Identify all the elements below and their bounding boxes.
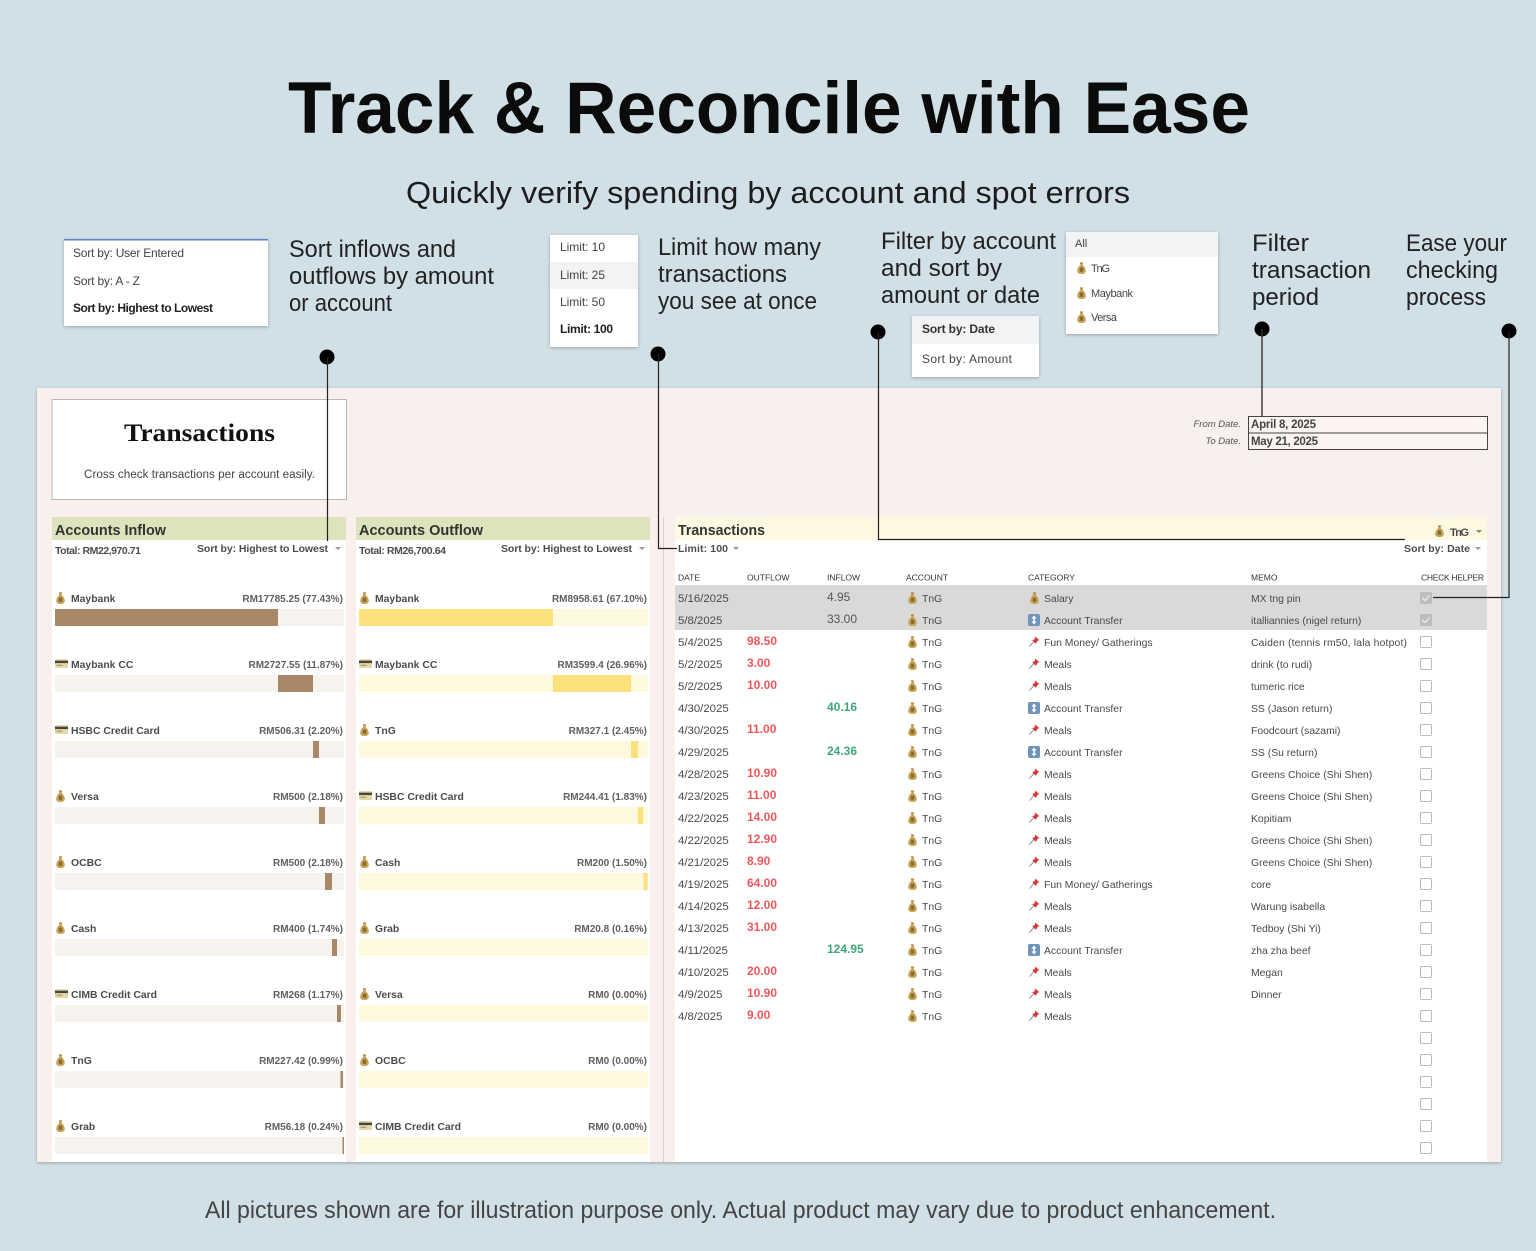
row 12: 4/22/2025 [678,835,729,847]
row 17: 4/11/2025 [678,945,728,957]
bar: CIMB Credit Card: CIMB Credit Card [71,990,157,1001]
row 19: 10.90 [747,986,777,1000]
row 6: 4/30/2025 [678,703,729,715]
date filter: From Date. [1193,419,1241,430]
row 3 [678,634,1432,649]
row 15 [678,898,1432,913]
row 18: Megan [1251,968,1283,979]
callout: sort: Sort inflows and [289,236,456,263]
bar: Cash: RM200 (1.50%) [577,858,647,869]
row 13: 8.90 [747,854,771,868]
row 8: 24.36 [827,744,857,758]
bar: Grab [359,922,648,956]
row 7: Foodcourt (sazami) [1251,726,1341,737]
row 19 [678,986,1432,1001]
bar: Maybank CC: RM2727.55 (11.87%) [248,660,343,671]
row 6 [678,700,1432,715]
bar: Maybank: RM8958.61 (67.10%) [552,594,647,605]
row 19: Dinner [1251,990,1282,1001]
bar: CIMB Credit Card [55,989,344,1022]
dropdown: account: Maybank [1091,288,1134,300]
dropdown: sort inflows: Sort by: A - Z [73,274,140,288]
row 10: Greens Choice (Shi Shen) [1251,792,1372,803]
row 8: SS (Su return) [1251,748,1317,759]
callout: filter account [881,228,1056,309]
panel: header box: Cross check transactions per account easily. [84,469,315,481]
row 1: 4.95 [827,590,851,604]
row 18: 20.00 [747,964,777,978]
row 11: Meals [1044,814,1072,825]
row 4: Meals [1044,660,1072,671]
callout: check helper [1406,230,1507,311]
callout: sort: or account [289,290,392,317]
row 17: TnG [922,946,942,957]
row 9: TnG [922,770,942,781]
bar: CIMB Credit Card [359,1121,648,1154]
row 11: Kopitiam [1251,814,1291,825]
panel: accounts inflow: Sort by: Highest to Lowest [197,543,328,555]
row 15: 12.00 [747,898,777,912]
bar: TnG [359,724,648,758]
row 5: tumeric rice [1251,682,1305,693]
callout: filter period [1252,230,1371,311]
table header [678,572,1484,582]
bar: Maybank: RM17785.25 (77.43%) [242,594,343,605]
row 12: 12.90 [747,832,777,846]
table header: OUTFLOW [747,572,790,582]
row 15: Warung isabella [1251,902,1325,913]
row 16: TnG [922,924,942,935]
row 4 [678,656,1432,671]
callout: check helper: checking [1406,257,1498,284]
bar: TnG: TnG [71,1056,92,1067]
bar: Cash [359,856,648,890]
row 14: 4/19/2025 [678,879,729,891]
row 1 [678,590,1432,605]
row 1: MX tng pin [1251,594,1301,605]
row 7: 4/30/2025 [678,725,729,737]
row 4: TnG [922,660,942,671]
row 14: 64.00 [747,876,777,890]
dropdown: account: All [1075,238,1087,250]
connector: date period [1254,322,1270,416]
dropdown: sort inflows: Sort by: Highest to Lowest [73,301,213,315]
bar: Maybank CC [55,659,344,692]
row 12: Greens Choice (Shi Shen) [1251,836,1372,847]
bar: HSBC Credit Card [359,791,648,824]
row 14: Fun Money/ Gatherings [1044,880,1153,891]
row 5 [678,678,1432,693]
callout: check helper: process [1406,284,1486,311]
bar: OCBC [55,856,344,890]
table header: DATE [678,572,700,582]
bar: TnG: TnG [375,726,396,737]
row 7: Meals [1044,726,1072,737]
bar: TnG: RM227.42 (0.99%) [259,1056,343,1067]
bar: Cash: Cash [375,858,400,869]
bar: Cash [55,922,344,956]
row 14: core [1251,880,1271,891]
bar: Versa [55,790,344,824]
panel: spreadsheet [37,388,1501,1162]
bar: CIMB Credit Card: RM0 (0.00%) [588,1122,647,1133]
empty checkboxes [1420,1032,1432,1154]
connector: filter account [870,324,1405,540]
row 2: TnG [922,616,942,627]
bar: OCBC: OCBC [375,1056,406,1067]
callout: limit [658,234,821,315]
panel: transactions table: TnG [1450,527,1469,539]
row 1: 5/16/2025 [678,593,729,605]
bar: Maybank CC: RM3599.4 (26.96%) [558,660,647,671]
row 13: Greens Choice (Shi Shen) [1251,858,1372,869]
bar: HSBC Credit Card: HSBC Credit Card [375,792,464,803]
date filter: May 21, 2025 [1251,436,1319,448]
row 18: TnG [922,968,942,979]
row 16: 4/13/2025 [678,923,729,935]
row 4: 3.00 [747,656,771,670]
callout: sort [289,236,494,317]
bar: OCBC: RM500 (2.18%) [273,858,343,869]
dropdown: sort inflows [64,239,268,326]
footer note: All pictures shown are for illustration purpose only. Actual product may vary due to product enhancement. [205,1197,1276,1224]
callout: limit: you see at once [658,288,817,315]
row 15: 4/14/2025 [678,901,729,913]
bar: Maybank CC: Maybank CC [71,660,134,671]
row 7 [678,722,1432,737]
table header: INFLOW [827,572,860,582]
bar: Maybank CC: Maybank CC [375,660,438,671]
connector: check helper [1433,324,1516,598]
row 14 [678,876,1432,891]
row 3: Caiden (tennis rm50, lala hotpot) [1251,638,1407,649]
bar: Versa [359,988,648,1022]
callout: check helper: Ease your [1406,230,1507,257]
date filter: April 8, 2025 [1251,419,1317,431]
panel: transactions table: Transactions [678,522,765,539]
row 18 [678,964,1432,979]
row 20 [678,1008,1432,1023]
row 20: Meals [1044,1012,1072,1023]
bar: TnG: RM327.1 (2.45%) [569,726,647,737]
dropdown: sort inflows: Sort by: User Entered [73,246,184,260]
panel: transactions table: Limit: 100 [678,543,728,555]
row 6: 40.16 [827,700,857,714]
row 19: 4/9/2025 [678,989,722,1001]
subtitle: Quickly verify spending by account and spot errors [406,175,1130,210]
row 13: 4/21/2025 [678,857,729,869]
callout: filter account: amount or date [881,282,1040,309]
row 15: TnG [922,902,942,913]
row 1: TnG [922,594,942,605]
dropdown: limit: Limit: 100 [560,322,613,336]
bar: Versa: Versa [375,990,403,1001]
dropdown: limit: Limit: 50 [560,295,605,309]
panel: accounts inflow: Accounts Inflow [55,522,166,539]
panel: accounts inflow: Total: RM22,970.71 [55,545,141,557]
bar: Grab: RM56.18 (0.24%) [265,1122,343,1133]
row 11: TnG [922,814,942,825]
bar: OCBC: OCBC [71,858,102,869]
panel: transactions table [675,517,1487,1162]
bar: Versa: RM0 (0.00%) [588,990,647,1001]
bar: OCBC [359,1054,648,1088]
row 5: 10.00 [747,678,777,692]
row 13 [678,854,1432,869]
row 6: Account Transfer [1044,704,1123,715]
row 5: TnG [922,682,942,693]
row 17 [678,942,1432,957]
table header: ACCOUNT [906,572,948,582]
bar: Maybank [55,592,344,626]
bar: Maybank: Maybank [375,594,420,605]
table header: MEMO [1251,572,1278,582]
bar: Grab: Grab [71,1122,95,1133]
row 5: 5/2/2025 [678,681,722,693]
row 9: Greens Choice (Shi Shen) [1251,770,1372,781]
row 4: 5/2/2025 [678,659,722,671]
bar: Maybank CC [359,659,648,692]
dropdown: sort date [912,316,1039,377]
bar: CIMB Credit Card: RM268 (1.17%) [273,990,343,1001]
row 19: TnG [922,990,942,1001]
bar: TnG [55,1054,344,1088]
panel: accounts outflow: Accounts Outflow [359,522,483,539]
bar: OCBC: RM0 (0.00%) [588,1056,647,1067]
row 2 [678,612,1432,627]
bar: Versa: RM500 (2.18%) [273,792,343,803]
bar: HSBC Credit Card: RM244.41 (1.83%) [563,792,647,803]
row 10: Meals [1044,792,1072,803]
row 8: Account Transfer [1044,748,1123,759]
dropdown: account: TnG [1091,263,1110,275]
table header: CHECK HELPER [1421,572,1484,582]
row 19: Meals [1044,990,1072,1001]
callout: filter period: Filter [1252,230,1309,257]
table header: CATEGORY [1028,572,1075,582]
bar: Grab [55,1120,344,1154]
row 13: TnG [922,858,942,869]
row 14: TnG [922,880,942,891]
panel: accounts inflow [52,517,346,1162]
row 11 [678,810,1432,825]
panel: accounts outflow: Total: RM26,700.64 [359,545,446,557]
row 2: Account Transfer [1044,616,1123,627]
bar: CIMB Credit Card: CIMB Credit Card [375,1122,461,1133]
row 8: TnG [922,748,942,759]
row 9: Meals [1044,770,1072,781]
date filter: To Date. [1205,436,1241,447]
panel: transactions table: Sort by: Date [1404,543,1470,555]
bar: Grab: Grab [375,924,399,935]
bar: HSBC Credit Card [55,725,344,758]
bar: Maybank: Maybank [71,594,116,605]
row 2: 5/8/2025 [678,615,722,627]
bar: Cash: Cash [71,924,96,935]
row 1: Salary [1044,594,1074,605]
row 10 [678,788,1432,803]
row 17: 124.95 [827,942,864,956]
panel: header box: Transactions [124,420,275,447]
row 12: Meals [1044,836,1072,847]
row 3: TnG [922,638,942,649]
callout: limit: transactions [658,261,787,288]
row 9 [678,766,1432,781]
dropdown: sort date: Sort by: Date [922,322,995,336]
row 13: Meals [1044,858,1072,869]
row 18: Meals [1044,968,1072,979]
row 11: 14.00 [747,810,777,824]
row 9: 10.90 [747,766,777,780]
row 16: Tedboy (Shi Yi) [1251,924,1321,935]
bar: Versa: Versa [71,792,99,803]
row 20: 9.00 [747,1008,771,1022]
row 8: 4/29/2025 [678,747,729,759]
row 10: TnG [922,792,942,803]
row 9: 4/28/2025 [678,769,729,781]
row 12: TnG [922,836,942,847]
row 2: 33.00 [827,612,857,626]
row 6: TnG [922,704,942,715]
callout: limit: Limit how many [658,234,821,261]
callout: sort: outflows by amount [289,263,494,290]
panel: accounts outflow: Sort by: Highest to Lowest [501,543,632,555]
callout: filter account: Filter by account [881,228,1056,255]
row 16: 31.00 [747,920,777,934]
row 20: 4/8/2025 [678,1011,722,1023]
row 10: 11.00 [747,788,777,802]
callout: filter period: period [1252,284,1319,311]
dropdown: sort date: Sort by: Amount [922,352,1013,366]
bar: Grab: RM20.8 (0.16%) [574,924,647,935]
row 15: Meals [1044,902,1072,913]
dropdown: limit: Limit: 25 [560,268,605,282]
row 4: drink (to rudi) [1251,660,1312,671]
bar: Maybank [359,592,648,626]
panel: accounts outflow [356,517,650,1162]
row 12 [678,832,1432,847]
row 17: zha zha beef [1251,946,1311,957]
row 2: italliannies (nigel return) [1251,616,1361,627]
row 16: Meals [1044,924,1072,935]
row 5: Meals [1044,682,1072,693]
connector: limit [650,346,677,548]
dropdown: limit [550,235,638,347]
row 16 [678,920,1432,935]
bar: HSBC Credit Card: HSBC Credit Card [71,726,160,737]
dropdown: limit: Limit: 10 [560,240,605,254]
connector: sort [320,350,334,541]
callout: filter account: and sort by [881,255,1002,282]
callout: filter period: transaction [1252,257,1371,284]
bar: HSBC Credit Card: RM506.31 (2.20%) [259,726,343,737]
row 3: 5/4/2025 [678,637,722,649]
row 3: Fun Money/ Gatherings [1044,638,1153,649]
row 10: 4/23/2025 [678,791,729,803]
title: Track & Reconcile with Ease [288,68,1250,149]
date filter [1193,416,1488,450]
panel: header box [52,400,346,500]
row 6: SS (Jason return) [1251,704,1332,715]
row 18: 4/10/2025 [678,967,729,979]
row 8 [678,744,1432,759]
row 20: TnG [922,1012,942,1023]
row 3: 98.50 [747,634,777,648]
row 17: Account Transfer [1044,946,1123,957]
row 7: TnG [922,726,942,737]
row 7: 11.00 [747,722,777,736]
dropdown: account [1066,232,1218,334]
row 11: 4/22/2025 [678,813,729,825]
bar: Cash: RM400 (1.74%) [273,924,343,935]
dropdown: account: Versa [1091,312,1118,324]
